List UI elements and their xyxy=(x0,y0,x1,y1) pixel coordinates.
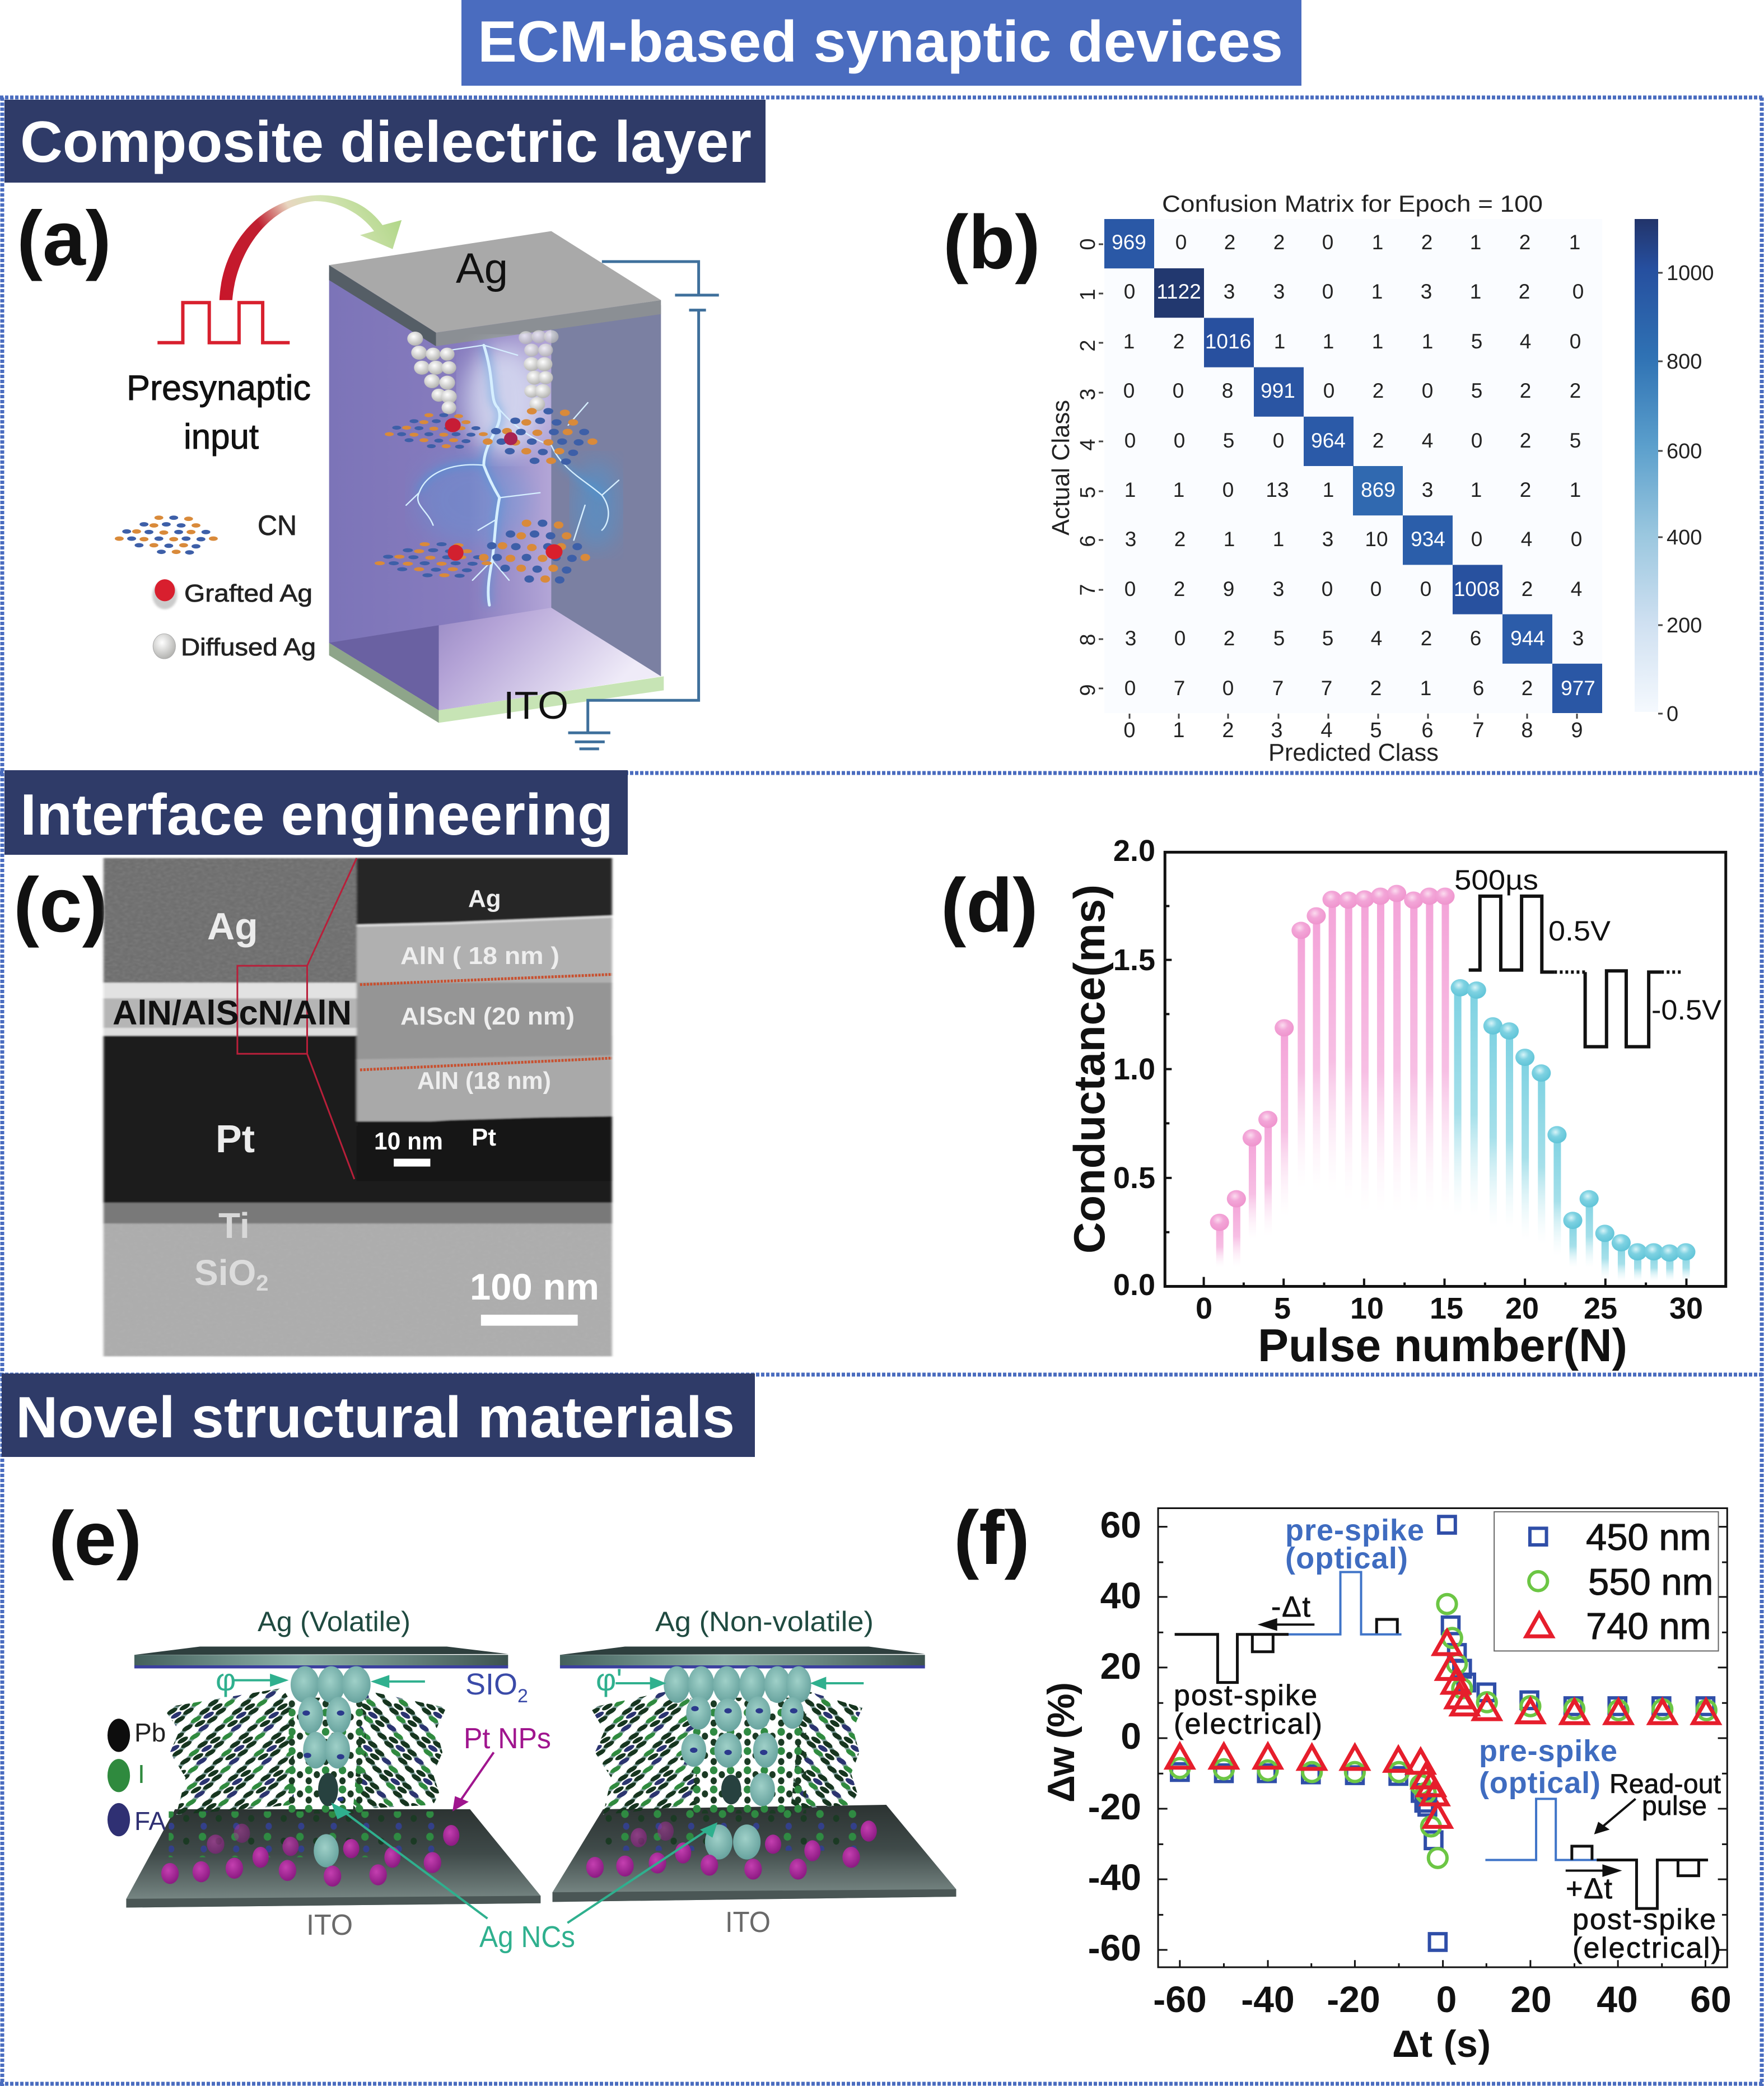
matrix values: 0 xyxy=(1422,379,1433,402)
atom legend markers xyxy=(108,1719,130,1836)
matrix values: 2 xyxy=(1421,231,1432,254)
matrix values: 0 xyxy=(1124,280,1135,303)
TEM labels: SiO xyxy=(194,1252,256,1293)
inset labels xyxy=(1454,864,1722,1026)
matrix values: 0 xyxy=(1322,280,1333,303)
inset labels xyxy=(374,885,575,1155)
matrix values: 0 xyxy=(1124,677,1136,700)
y tick labels: 20 xyxy=(1100,1645,1141,1687)
inset labels: 0.5V xyxy=(1548,915,1611,947)
ITO labels: ITO xyxy=(306,1909,353,1941)
matrix values: 7 xyxy=(1272,677,1284,700)
ITO labels: ITO xyxy=(725,1906,771,1939)
matrix values: 0 xyxy=(1322,578,1333,600)
plot xyxy=(1165,852,1726,1287)
matrix values: 1 xyxy=(1123,330,1135,353)
Pt nanoparticles xyxy=(161,1824,459,1887)
series 450 nm xyxy=(1172,1516,1714,1950)
inset labels: Pt xyxy=(472,1124,496,1151)
depression stems xyxy=(1454,988,1690,1281)
x axis labels: 30 xyxy=(1669,1292,1703,1325)
matrix values: 10 xyxy=(1365,528,1388,551)
device titles: Ag (Volatile) xyxy=(258,1606,410,1637)
matrix values: 0 xyxy=(1123,379,1135,402)
inset labels: AlScN (20 nm) xyxy=(400,1003,575,1030)
matrix values: 4 xyxy=(1521,528,1532,551)
depression points xyxy=(1451,979,1696,1261)
y tick labels: 40 xyxy=(1100,1575,1141,1616)
Ag NCs label: Ag NCs xyxy=(479,1920,575,1954)
x axis ticks: 4 xyxy=(1320,719,1333,742)
matrix values: 0 xyxy=(1222,677,1234,700)
colour bar: 800 xyxy=(1667,350,1702,374)
matrix values: 4 xyxy=(1422,429,1433,452)
x axis labels: 10 xyxy=(1350,1292,1384,1325)
TEM image xyxy=(104,858,612,1356)
axis titles: Δt (s) xyxy=(1392,2023,1491,2065)
matrix values: 3 xyxy=(1572,627,1584,650)
matrix values xyxy=(1112,231,1595,700)
x axis ticks: 2 xyxy=(1222,719,1234,742)
colour bar: 1000 xyxy=(1667,262,1714,285)
annotation: post-spike upper xyxy=(1174,1591,1322,1740)
matrix values: 5 xyxy=(1223,429,1234,452)
matrix values: 3 xyxy=(1125,627,1136,650)
device titles xyxy=(258,1606,874,1637)
annotation: post-spike upper: post-spike xyxy=(1174,1679,1317,1712)
panel f: STDP chart: Δw (%) xyxy=(1040,1682,1082,1803)
annotation: read-out and post-spike lower: post-spike xyxy=(1572,1903,1716,1936)
x axis labels: 5 xyxy=(1274,1292,1291,1325)
diffused Ag columns xyxy=(407,330,558,414)
y axis labels: 1.5 xyxy=(1113,943,1155,977)
SiO2 label: SIO xyxy=(465,1668,517,1701)
matrix values: 2 xyxy=(1224,627,1235,650)
matrix values: 2 xyxy=(1173,330,1184,353)
x axis ticks: 3 xyxy=(1271,719,1283,742)
x tick labels: 60 xyxy=(1690,1978,1732,2020)
heading: composite dielectric layer: Composite dielectric layer xyxy=(20,110,752,175)
colour bar: 400 xyxy=(1667,526,1702,550)
matrix values: 2 xyxy=(1421,627,1432,650)
matrix values: 934 xyxy=(1411,528,1445,551)
panel label b: (b) xyxy=(943,199,1040,285)
legend labels xyxy=(1586,1516,1713,1647)
left device: volatile xyxy=(126,1646,540,1907)
legend labels: Diffused Ag xyxy=(181,634,316,661)
series 740 nm xyxy=(1167,1631,1719,1827)
matrix values: 1 xyxy=(1173,478,1184,501)
x axis ticks: 1 xyxy=(1173,719,1185,742)
y axis ticks: 6 xyxy=(1076,535,1100,547)
matrix values: 13 xyxy=(1266,478,1289,501)
title: ECM-based synaptic devices xyxy=(478,10,1283,74)
y axis ticks: 9 xyxy=(1076,684,1100,696)
legend labels: Grafted Ag xyxy=(184,580,312,607)
y axis labels: 2.0 xyxy=(1113,834,1155,868)
panel e: perovskite device schematic xyxy=(49,1496,956,1954)
matrix values: 2 xyxy=(1519,231,1530,254)
presynaptic input label: Presynaptic xyxy=(127,369,311,408)
matrix values: 969 xyxy=(1112,231,1146,254)
matrix values: 2 xyxy=(1174,528,1186,551)
matrix values: 2 xyxy=(1522,677,1533,700)
annotation: pre-spike upper: (optical) xyxy=(1285,1542,1408,1575)
matrix values: 3 xyxy=(1322,528,1333,551)
device drawings xyxy=(108,1646,956,1923)
series 550 nm xyxy=(1170,1595,1716,1868)
x axis ticks: 0 xyxy=(1123,719,1136,742)
matrix values: 3 xyxy=(1273,280,1285,303)
matrix values: 0 xyxy=(1124,578,1136,600)
chart title: Confusion Matrix for Epoch = 100 xyxy=(1162,190,1543,217)
matrix values: 0 xyxy=(1173,379,1184,402)
panel d: conductance chart xyxy=(941,834,1726,1371)
TEM labels xyxy=(194,905,599,1307)
x axis ticks: 7 xyxy=(1472,719,1485,742)
colour bar xyxy=(1635,219,1714,726)
x axis ticks xyxy=(1123,714,1583,742)
annotation: read-out and post-spike lower: +Δt xyxy=(1566,1873,1613,1905)
matrix values: 1 xyxy=(1224,528,1235,551)
matrix values: 0 xyxy=(1174,429,1185,452)
matrix values: 1 xyxy=(1124,478,1136,501)
y tick labels: -40 xyxy=(1088,1856,1141,1898)
annotation: pre-spike upper xyxy=(1285,1514,1424,1575)
y tick labels: 0 xyxy=(1121,1715,1141,1757)
matrix values: 0 xyxy=(1570,330,1581,353)
barrier labels: φ' xyxy=(596,1662,622,1697)
atom legend labels: I xyxy=(138,1759,145,1789)
matrix values: 5 xyxy=(1322,627,1333,650)
matrix values: 9 xyxy=(1223,578,1234,600)
matrix values: 977 xyxy=(1561,677,1595,700)
y axis ticks: 8 xyxy=(1076,634,1100,646)
matrix values: 0 xyxy=(1124,429,1136,452)
annotation: pre-spike lower: pre-spike xyxy=(1479,1734,1617,1768)
matrix values: 869 xyxy=(1361,478,1396,501)
matrix values: 964 xyxy=(1311,429,1346,452)
x axis ticks: 9 xyxy=(1571,719,1583,742)
x axis labels: 0 xyxy=(1196,1292,1212,1325)
x axis ticks: 8 xyxy=(1521,719,1533,742)
potentiation stems xyxy=(1216,893,1449,1268)
panel a: device schematic: input xyxy=(184,417,259,457)
matrix values: 3 xyxy=(1421,280,1432,303)
matrix values: 1 xyxy=(1323,330,1334,353)
matrix values: 1 xyxy=(1570,478,1581,501)
matrix values: 1122 xyxy=(1156,280,1201,303)
TEM labels: 100 nm xyxy=(470,1266,599,1307)
device titles: Ag (Non-volatile) xyxy=(655,1606,874,1637)
matrix values: 2 xyxy=(1520,379,1531,402)
matrix values: 4 xyxy=(1371,627,1382,650)
legend box xyxy=(1494,1512,1719,1651)
matrix values: 2 xyxy=(1370,677,1382,700)
y axis ticks: 0 xyxy=(1076,238,1100,250)
x tick labels: -20 xyxy=(1327,1978,1380,2020)
annotation: pre-spike lower: (optical) xyxy=(1479,1766,1600,1800)
barrier labels xyxy=(216,1662,622,1697)
axes frame xyxy=(1158,1508,1727,1967)
x tick labels xyxy=(1153,1978,1732,2020)
matrix values: 0 xyxy=(1222,478,1234,501)
atom legend labels: FA xyxy=(134,1806,166,1836)
legend labels: 450 nm xyxy=(1586,1516,1711,1558)
annotation: pre-spike upper: pre-spike xyxy=(1285,1514,1424,1547)
matrix values: 1 xyxy=(1569,231,1580,254)
Pt NPs label: Pt NPs xyxy=(464,1722,551,1755)
axis titles: Pulse number(N) xyxy=(1258,1319,1627,1371)
matrix values: 0 xyxy=(1471,429,1482,452)
ITO labels xyxy=(306,1906,771,1941)
x axis labels xyxy=(1196,1292,1703,1325)
matrix values: 2 xyxy=(1224,231,1235,254)
Ag filament xyxy=(664,1666,811,1860)
y tick labels xyxy=(1088,1504,1141,1968)
axis titles: Predicted Class xyxy=(1268,739,1439,766)
panel f: STDP chart xyxy=(954,1495,1732,2065)
x tick labels: 40 xyxy=(1597,1978,1638,2020)
matrix values: 0 xyxy=(1571,528,1582,551)
matrix values: 2 xyxy=(1519,280,1530,303)
matrix values: 0 xyxy=(1322,231,1333,254)
matrix values: 3 xyxy=(1125,528,1136,551)
matrix values: 2 xyxy=(1522,578,1533,600)
matrix values: 991 xyxy=(1261,379,1295,402)
potentiation points xyxy=(1210,885,1455,1231)
y axis labels xyxy=(1113,834,1155,1302)
matrix values: 1008 xyxy=(1454,578,1500,600)
matrix values: 1 xyxy=(1372,231,1383,254)
matrix values: 2 xyxy=(1373,379,1384,402)
y axis ticks: 5 xyxy=(1076,486,1100,499)
y axis ticks: 7 xyxy=(1076,584,1100,596)
matrix values: 0 xyxy=(1323,379,1334,402)
panel b: confusion matrix xyxy=(943,190,1714,766)
panel label c: (c) xyxy=(13,862,108,948)
inset pulse scheme xyxy=(1469,896,1661,1047)
legend labels: CN xyxy=(258,510,297,541)
x axis labels: 20 xyxy=(1505,1292,1539,1325)
y tick labels: -20 xyxy=(1088,1786,1141,1827)
matrix values: 1 xyxy=(1420,677,1431,700)
matrix values: 0 xyxy=(1420,578,1431,600)
legend labels: 740 nm xyxy=(1586,1605,1711,1647)
presynaptic pulse xyxy=(157,302,290,343)
panel label a: (a) xyxy=(17,195,111,282)
x tick labels: -60 xyxy=(1153,1978,1207,2020)
matrix values: 1 xyxy=(1273,528,1284,551)
matrix values: 5 xyxy=(1471,330,1482,353)
panel label e: (e) xyxy=(49,1496,142,1581)
matrix values: 3 xyxy=(1273,578,1284,600)
matrix values: 0 xyxy=(1471,528,1482,551)
matrix values: 2 xyxy=(1570,379,1581,402)
legend labels: 550 nm xyxy=(1588,1561,1713,1603)
matrix values: 1 xyxy=(1323,478,1334,501)
spike scheme: positive delay xyxy=(1485,1799,1708,1908)
matrix values: 1 xyxy=(1471,478,1482,501)
atom legend labels xyxy=(134,1718,166,1836)
teal and magenta arrows xyxy=(234,1674,864,1923)
right device: non-volatile xyxy=(553,1646,956,1902)
annotation: read-out and post-spike lower: (electrical) xyxy=(1572,1932,1721,1964)
matrix values: 1 xyxy=(1274,330,1285,353)
matrix values: 1 xyxy=(1372,330,1383,353)
y tick labels: 60 xyxy=(1100,1504,1141,1545)
panel c: TEM cross-section: AlN/AlScN/AlN xyxy=(113,994,352,1032)
matrix values: 6 xyxy=(1470,627,1481,650)
circuit wiring xyxy=(568,262,719,749)
device labels: Ag xyxy=(456,245,508,292)
legend labels xyxy=(181,510,316,661)
heatmap cells xyxy=(1104,219,1602,713)
matrix values: 2 xyxy=(1273,231,1285,254)
matrix values: 1 xyxy=(1371,280,1383,303)
annotation: pre-spike lower xyxy=(1479,1734,1617,1800)
matrix values: 1 xyxy=(1422,330,1433,353)
schematic shapes xyxy=(115,195,719,749)
SiO2 label: 2 xyxy=(517,1685,528,1707)
matrix values: 0 xyxy=(1370,578,1382,600)
y axis ticks: 4 xyxy=(1076,439,1100,451)
matrix values: 0 xyxy=(1572,280,1584,303)
x axis labels: 25 xyxy=(1584,1292,1617,1325)
inset labels: Ag xyxy=(468,885,501,912)
matrix values: 944 xyxy=(1510,627,1545,650)
matrix values: 5 xyxy=(1273,627,1285,650)
matrix values: 8 xyxy=(1222,379,1233,402)
matrix values: 7 xyxy=(1321,677,1332,700)
panel b: confusion matrix: Actual Class xyxy=(1047,400,1075,536)
y axis ticks xyxy=(1076,238,1103,696)
matrix values: 0 xyxy=(1273,429,1284,452)
colour bar: 0 xyxy=(1667,702,1678,726)
TEM labels: 2 xyxy=(256,1271,269,1296)
panel a: device schematic: ITO xyxy=(503,683,568,727)
colour bar: 200 xyxy=(1667,614,1702,637)
matrix values: 6 xyxy=(1473,677,1484,700)
lightning filament xyxy=(406,345,619,606)
TEM labels: Pt xyxy=(216,1117,255,1161)
x axis labels: 15 xyxy=(1430,1292,1463,1325)
x tick labels: -40 xyxy=(1241,1978,1295,2020)
y axis labels: 1.0 xyxy=(1113,1053,1155,1086)
matrix values: 1 xyxy=(1470,280,1481,303)
carbon nitride sheets xyxy=(375,408,598,584)
plot xyxy=(1158,1508,1727,1967)
x axis ticks: 5 xyxy=(1370,719,1382,742)
heading: novel structural materials: Novel structural materials xyxy=(16,1385,735,1450)
arrow: presynaptic to device xyxy=(220,195,402,300)
y axis ticks: 2 xyxy=(1076,339,1100,352)
panel label f: (f) xyxy=(954,1495,1030,1580)
matrix values: 3 xyxy=(1224,280,1235,303)
matrix values: 2 xyxy=(1520,429,1531,452)
TEM labels: Ti xyxy=(218,1205,250,1246)
matrix values: 0 xyxy=(1174,627,1186,650)
annotation: post-spike upper: -Δt xyxy=(1271,1591,1311,1623)
annotation: read-out and post-spike lower xyxy=(1566,1770,1721,1964)
inset labels: 500µs xyxy=(1454,864,1538,896)
matrix values: 1016 xyxy=(1205,330,1251,353)
axes frame xyxy=(1165,852,1726,1287)
TEM labels: Ag xyxy=(207,905,258,948)
x axis ticks: 6 xyxy=(1421,719,1434,742)
magnified inset xyxy=(357,858,612,1181)
inset labels: -0.5V xyxy=(1651,994,1722,1026)
matrix values: 3 xyxy=(1422,478,1433,501)
panel d: conductance chart: Conductance(ms) xyxy=(1065,884,1114,1254)
Pt nanoparticles xyxy=(586,1820,877,1880)
matrix values: 5 xyxy=(1471,379,1482,402)
matrix values: 4 xyxy=(1520,330,1531,353)
y axis ticks: 1 xyxy=(1076,288,1100,301)
heading: interface engineering: Interface engineering xyxy=(20,783,613,848)
matrix values: 2 xyxy=(1373,429,1384,452)
matrix values: 0 xyxy=(1175,231,1187,254)
x tick labels: 20 xyxy=(1510,1978,1552,2020)
spike scheme: negative delay xyxy=(1175,1572,1402,1683)
matrix values: 2 xyxy=(1174,578,1185,600)
legend markers xyxy=(115,515,218,555)
matrix values: 5 xyxy=(1570,429,1581,452)
annotation: read-out and post-spike lower: Read-out xyxy=(1609,1770,1721,1799)
annotation: post-spike upper: (electrical) xyxy=(1174,1708,1322,1740)
panel c: TEM cross-section xyxy=(13,858,612,1356)
y tick labels: -60 xyxy=(1088,1927,1141,1968)
colour bar: 600 xyxy=(1667,440,1702,463)
barrier labels: φ xyxy=(216,1662,236,1697)
atom legend labels: Pb xyxy=(134,1718,166,1747)
zoom indicator xyxy=(237,858,357,1179)
y axis ticks: 3 xyxy=(1076,388,1100,401)
annotation: read-out and post-spike lower: pulse xyxy=(1642,1791,1707,1821)
inset labels: AlN (18 nm) xyxy=(417,1067,551,1095)
matrix values: 1 xyxy=(1470,231,1481,254)
matrix values: 7 xyxy=(1174,677,1185,700)
y axis labels: 0.5 xyxy=(1113,1161,1155,1195)
x tick labels: 0 xyxy=(1436,1978,1457,2020)
inset labels: 10 nm xyxy=(374,1128,443,1155)
panel a: device schematic xyxy=(17,195,719,749)
Ag filament xyxy=(291,1666,371,1868)
y axis labels: 0.0 xyxy=(1113,1268,1155,1302)
panel label d: (d) xyxy=(941,863,1038,948)
inset labels: AlN ( 18 nm ) xyxy=(400,942,559,970)
matrix values: 2 xyxy=(1520,478,1531,501)
matrix values: 4 xyxy=(1571,578,1582,600)
